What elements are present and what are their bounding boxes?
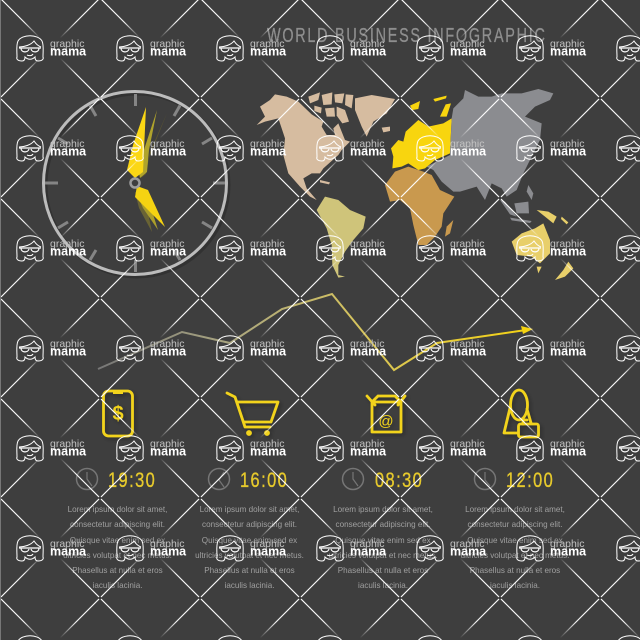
text block 4: iaculis lacinia. (490, 581, 540, 590)
watermark logos: graphic (50, 138, 84, 150)
time: 08:30: 08:30 (375, 468, 422, 491)
text block 3: Quisque vitae enim sed ex (335, 536, 431, 545)
watermark logos: mama (350, 144, 387, 158)
time: 19:30 (76, 468, 155, 491)
time: 08:30 (342, 468, 422, 491)
watermark logos: mama (250, 544, 287, 558)
asia (427, 89, 553, 223)
time: 12:00 (474, 468, 553, 491)
text block 2: consectetur adipiscing elit. (202, 520, 297, 529)
watermark logos: graphic (150, 538, 184, 550)
text block 2: Phasellus at nulla et eros (204, 566, 295, 575)
watermark logos: graphic (150, 38, 184, 50)
watermark logos: mama (350, 244, 387, 258)
icon: box with at sign: @ (378, 413, 394, 430)
watermark logos: graphic (250, 38, 284, 50)
watermark logos: mama (150, 544, 187, 558)
watermark logos: graphic (250, 338, 284, 350)
watermark logos: mama (50, 144, 87, 158)
text block 1: Quisque vitae enim sed ex (70, 536, 165, 545)
icon: shopping cart (227, 393, 278, 434)
watermark logos: graphic (50, 538, 84, 550)
australia and oceania (512, 210, 573, 280)
text block 4: Lorem ipsum dolor sit amet, (465, 505, 565, 514)
time: 16:00: 16:00 (240, 468, 287, 491)
europe (391, 96, 452, 170)
title: WORLD BUSINESS INFOGRAPHIC (267, 24, 545, 47)
watermark logos: graphic (50, 238, 84, 250)
watermark logos: graphic (250, 438, 284, 450)
text block 1: Phasellus at nulla et eros (72, 566, 163, 575)
text block 3: iaculis lacinia. (358, 581, 408, 590)
watermark logos: mama (250, 444, 287, 458)
watermark logos: mama (450, 244, 487, 258)
watermark logos: mama (50, 244, 87, 258)
watermark logos: graphic (550, 38, 584, 50)
watermark logos: graphic (450, 338, 484, 350)
watermark logos: mama (550, 544, 587, 558)
watermark logos: graphic (450, 438, 484, 450)
watermark logos: graphic (550, 338, 584, 350)
watermark logos: graphic (350, 538, 384, 550)
watermark logos: mama (250, 244, 287, 258)
watermark logos: graphic (250, 538, 284, 550)
watermark logos: mama (150, 144, 187, 158)
watermark logos: mama (150, 444, 187, 458)
text block 2: Lorem ipsum dolor sit amet, (200, 505, 299, 514)
watermark logos: graphic (350, 238, 384, 250)
watermark logos: graphic (550, 538, 584, 550)
watermark logos: graphic (350, 38, 384, 50)
text block 2: ultricies volutpat et nec metus. (195, 551, 304, 560)
time: 16:00 (208, 468, 287, 491)
watermark logos: mama (450, 44, 487, 58)
watermark logos: mama (550, 244, 587, 258)
text block 2: Quisque vitae enim sed ex (202, 536, 297, 545)
watermark logos: mama (450, 344, 487, 358)
watermark logos: mama (150, 344, 187, 358)
text block 1: ultricies volutpat et nec metus. (63, 551, 172, 560)
icon: phone with dollar (104, 391, 132, 436)
watermark logos: mama (450, 444, 487, 458)
watermark logos: graphic (550, 438, 584, 450)
time: 12:00: 12:00 (506, 468, 553, 491)
watermark logos: mama (550, 344, 587, 358)
watermark logos: graphic (550, 138, 584, 150)
africa (385, 167, 454, 245)
text block 4: consectetur adipiscing elit. (468, 520, 562, 529)
watermark logos: graphic (350, 338, 384, 350)
watermark logos: mama (350, 444, 387, 458)
world map (257, 89, 573, 280)
icon: phone with dollar: $ (112, 403, 124, 425)
watermark logos: graphic (50, 38, 84, 50)
watermark logos: mama (150, 44, 187, 58)
watermark logos: graphic (150, 438, 184, 450)
watermark logos: mama (250, 44, 287, 58)
watermark logos: graphic (250, 238, 284, 250)
watermark logos: graphic (550, 238, 584, 250)
text block 4: Quisque vitae enim sed ex (467, 536, 563, 545)
text block 3: consectetur adipiscing elit. (336, 520, 430, 529)
watermark logos: graphic (150, 238, 184, 250)
watermark logos: graphic (150, 338, 184, 350)
text block 4: ultricies volutpat et nec metus. (461, 551, 569, 560)
watermark logos: mama (550, 44, 587, 58)
watermark logos: graphic (150, 138, 184, 150)
watermark logos: mama (350, 44, 387, 58)
watermark logos: mama (350, 544, 387, 558)
text block 3: ultricies volutpat et nec metus. (329, 551, 437, 560)
text block 3: Lorem ipsum dolor sit amet, (333, 505, 433, 514)
watermark logos: graphic (50, 338, 84, 350)
watermark logos: mama (150, 244, 187, 258)
watermark logos: mama (50, 444, 87, 458)
watermark logos: graphic (450, 38, 484, 50)
watermark logos: mama (50, 44, 87, 58)
watermark logos: mama (250, 144, 287, 158)
watermark logos: graphic (50, 438, 84, 450)
text block 2: iaculis lacinia. (225, 581, 274, 590)
south america (317, 197, 366, 278)
watermark logos: mama (50, 544, 87, 558)
clock (44, 92, 228, 276)
watermark logos: graphic (350, 438, 384, 450)
watermark logos: graphic (450, 538, 484, 550)
watermark logos: mama (450, 144, 487, 158)
watermark logos: graphic (450, 138, 484, 150)
time: 19:30: 19:30 (108, 468, 155, 491)
watermark logos: mama (50, 344, 87, 358)
text block 4: Phasellus at nulla et eros (470, 566, 560, 575)
watermark logos: mama (450, 544, 487, 558)
watermark logos: mama (250, 344, 287, 358)
watermark logos: mama (550, 444, 587, 458)
line chart with arrow (98, 294, 533, 370)
watermark logos: graphic (450, 238, 484, 250)
text block 1: iaculis lacinia. (93, 581, 142, 590)
watermark logos: mama (550, 144, 587, 158)
watermark logos: mama (350, 344, 387, 358)
icon: shopping bag (504, 390, 538, 437)
north america (257, 92, 395, 200)
text block 3: Phasellus at nulla et eros (338, 566, 428, 575)
text block 1: Lorem ipsum dolor sit amet, (68, 505, 167, 514)
icon: box with at sign (367, 396, 405, 432)
watermark logos: graphic (250, 138, 284, 150)
watermark logos: graphic (350, 138, 384, 150)
text block 1: consectetur adipiscing elit. (70, 520, 165, 529)
